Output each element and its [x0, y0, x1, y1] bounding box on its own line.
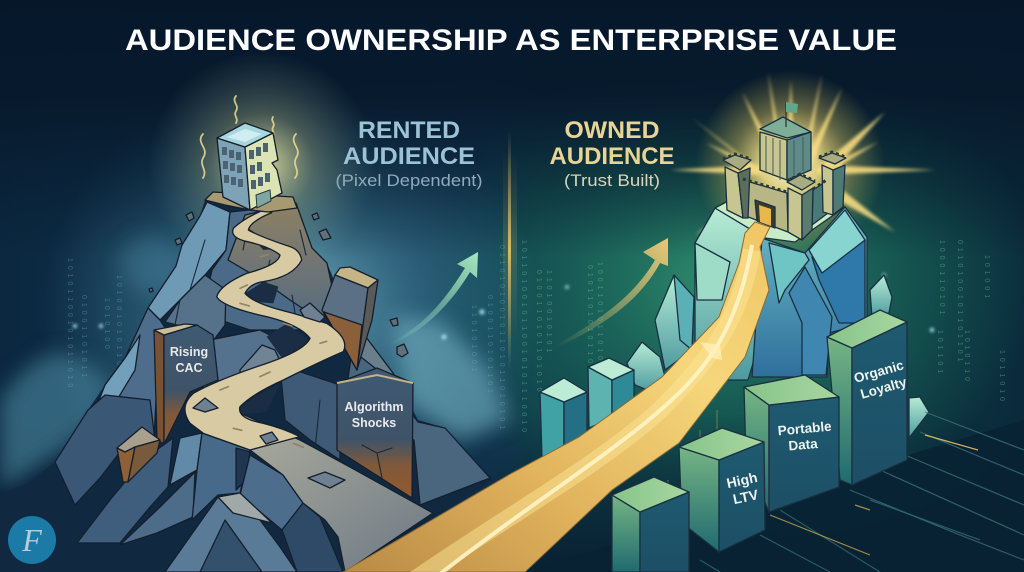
falling rubble	[149, 212, 408, 357]
winding path	[185, 209, 345, 450]
label: rising CAC: Rising	[170, 345, 208, 359]
heading: rented audience: (Pixel Dependent)	[336, 171, 482, 190]
grey lower plateau	[203, 413, 433, 572]
decorative binary rain right: 0 1 0 1 1 0 1 0 1 0 1 1 0 1 0 0	[586, 265, 593, 387]
heading: rented audience: RENTED	[358, 117, 460, 144]
castle battlements	[723, 152, 846, 192]
decorative binary rain left: 1 0 1 0 0 1 0 1 0 1 1 0 1	[115, 275, 122, 374]
decorative binary rain right: 1 0 1 1 0 1	[936, 330, 943, 374]
title: AUDIENCE OWNERSHIP AS ENTERPRISE VALUE	[125, 24, 897, 57]
decorative binary rain left	[66, 245, 505, 430]
panel: owned audience fortress	[343, 70, 1024, 572]
decorative binary rain right: 1 0 0 1 1 0 1 0 1 1 0 1 0	[596, 262, 603, 361]
decorative glints	[73, 273, 934, 340]
castle	[723, 102, 846, 240]
decorative binary rain left: 1 0 1 0 1 0 0	[103, 298, 110, 350]
boulder lower left	[117, 427, 160, 482]
building windows	[222, 143, 270, 189]
decorative binary rain right	[520, 240, 1005, 433]
decorative binary rain left: 1 1 0 1 0 1 0 0 1	[470, 305, 477, 373]
vertical light lines under road	[668, 410, 717, 510]
stone: algorithm shocks	[337, 368, 413, 498]
box: organic loyalty	[827, 310, 911, 485]
box: high LTV	[679, 428, 765, 552]
crystal left face	[695, 208, 765, 380]
castle keep	[760, 117, 811, 180]
decorative binary rain right: 1 1 0 1 0 0 1 0 1 0 1	[545, 270, 552, 353]
glow behind building	[147, 50, 377, 280]
label: high LTV: High	[725, 469, 759, 491]
golden road	[343, 222, 770, 572]
heading: rented audience	[336, 117, 482, 190]
box: unlabeled front block	[612, 477, 689, 572]
decorative binary rain right: 1 0 1 1 0 1 0	[998, 350, 1005, 402]
arrow: owned upward	[556, 238, 668, 348]
crystal cluster	[627, 200, 929, 438]
heading: rented audience: AUDIENCE	[343, 143, 475, 170]
rock slab upper right	[322, 267, 378, 370]
icon: heat wisps	[201, 96, 298, 178]
decorative binary rain left: 0 1 0 0 1 1 0 1 0 1 1	[80, 295, 87, 378]
heading: owned audience: OWNED	[564, 117, 660, 144]
stone: rising CAC	[154, 324, 218, 444]
decorative binary rain right: 1 0 1 0 0 1	[983, 255, 990, 299]
upper mountain facets	[92, 202, 490, 505]
label: rising CAC: CAC	[175, 361, 203, 375]
castle walls and towers	[723, 153, 846, 240]
label: algorithm shocks: Algorithm	[344, 400, 404, 414]
data circuit lines	[700, 412, 1024, 572]
golden glow	[695, 70, 885, 260]
decorative binary rain right: 1 0 0 0 1 1 0 1 0 1	[938, 240, 945, 315]
mountain silhouette	[0, 192, 493, 572]
decorative binary rain right: 0 1 1 0 1 0 0 1 0 1 1 0 1 1 0 1	[956, 240, 963, 362]
icon: sunburst rays	[670, 72, 935, 235]
flag	[786, 102, 798, 127]
icon: logo badge: F	[21, 522, 42, 558]
crystal right face	[752, 207, 867, 377]
icon: logo badge	[8, 516, 56, 564]
label: portable data: Data	[788, 436, 819, 453]
arrow: rented upward	[390, 252, 478, 346]
upper mountain cracks	[115, 225, 405, 480]
decorative binary rain right: 0 1 0 0 1 1 0 1 0 1 1 0 1 0 1 0	[535, 270, 542, 392]
boulder on path	[193, 303, 345, 488]
box: portable data	[744, 375, 839, 512]
label: high LTV: LTV	[731, 486, 760, 507]
label: organic loyalty: Organic	[852, 357, 905, 386]
heading: owned audience: (Trust Built)	[564, 171, 660, 190]
building on summit	[205, 123, 297, 212]
heading: owned audience	[550, 117, 674, 190]
decorative binary rain right: 1 0 1 0 1 1 0	[963, 330, 970, 382]
crystal bars	[540, 358, 634, 458]
dark pockets beside path	[240, 228, 310, 415]
decorative binary rain left: 0 1 1 0 1 0 1 0 0 1 0 1 1 0 1 0 1 1 0 1 0 1 0 1	[498, 245, 505, 430]
crystal plateau	[715, 200, 845, 242]
heading: owned audience: AUDIENCE	[550, 143, 674, 170]
label: organic loyalty: Loyalty	[859, 374, 909, 402]
label: portable data: Portable	[777, 419, 832, 438]
decorative binary rain right: 1 0 1 1 0 1 0 0 1 0 1 1 0 0 1 0 1 0 1 1 1 0 0 1 0	[520, 240, 527, 433]
decorative binary rain left: 0 1 0 0 1 1 0 1 0 1 1 0 1	[486, 295, 493, 394]
label: algorithm shocks: Shocks	[352, 416, 396, 430]
decorative binary rain left: 1 0 1 0 1 1 0 0 1 0 1 0 1 1 0 1 0	[66, 258, 73, 388]
clouds	[0, 237, 510, 490]
lower mountain facets	[55, 395, 343, 572]
panel: rented audience mountain	[0, 50, 493, 572]
